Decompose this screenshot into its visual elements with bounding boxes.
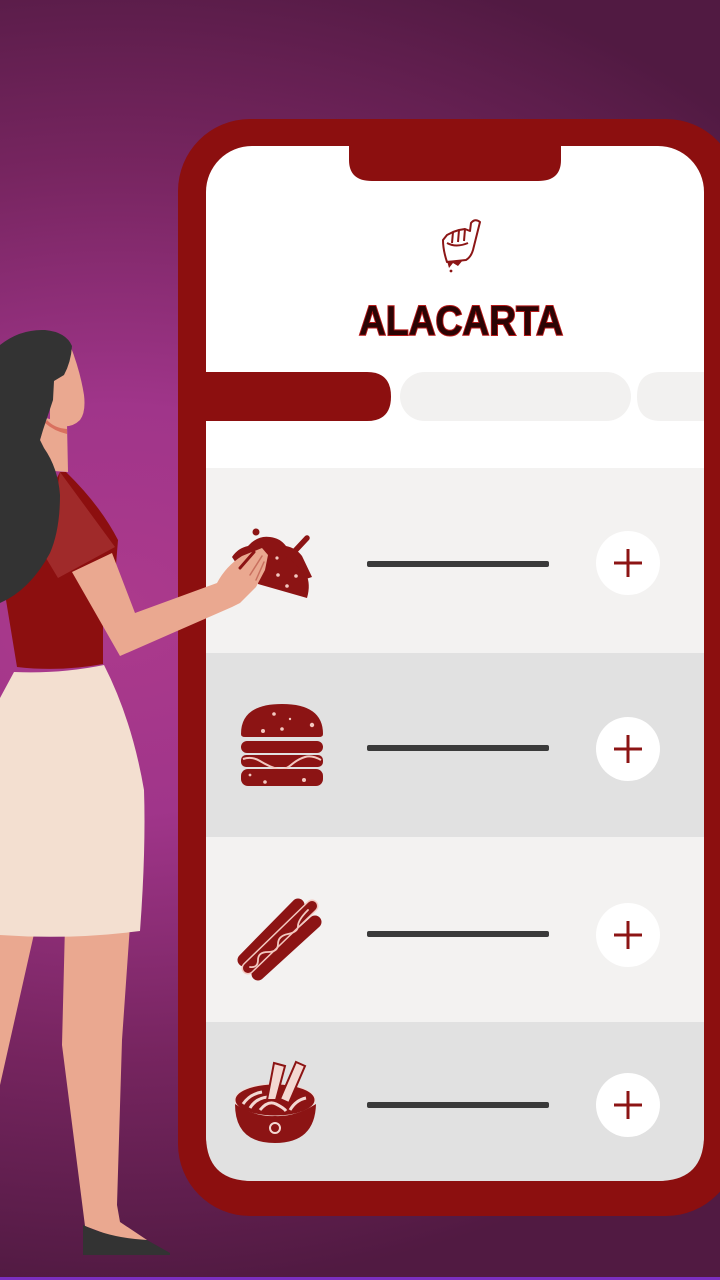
inactive tab [400, 372, 631, 421]
arm and hand [72, 548, 268, 656]
row divider line [367, 1102, 549, 1108]
icon: noodle bowl [235, 1062, 316, 1143]
finger lines [250, 556, 264, 580]
taco leaf over hand [240, 552, 254, 568]
shoe [83, 1225, 170, 1255]
icon: taco [232, 528, 312, 598]
phone screen [206, 146, 704, 1181]
phone notch [349, 146, 561, 181]
row: noodles [206, 1022, 704, 1181]
bottom strip [0, 1277, 720, 1280]
front leg [62, 925, 147, 1243]
active tab [206, 372, 391, 421]
neck [40, 418, 68, 472]
back leg [0, 925, 36, 1085]
phone [178, 119, 720, 1216]
row divider line [367, 931, 549, 937]
category tabs [206, 372, 704, 421]
row divider line [367, 561, 549, 567]
phone frame [178, 119, 720, 1216]
add button [596, 903, 660, 967]
row: taco [206, 468, 704, 653]
row: hot dog [206, 837, 704, 1022]
choker [45, 420, 67, 434]
sleeve [46, 472, 115, 578]
row divider line [367, 745, 549, 751]
icon: pointing hand [443, 220, 480, 272]
inactive tab partial [637, 372, 704, 421]
face [50, 345, 84, 426]
add button [596, 1073, 660, 1137]
add button [596, 717, 660, 781]
shirt [0, 472, 118, 669]
add button [596, 531, 660, 595]
row: burger [206, 653, 704, 837]
icon: hot dog [244, 905, 315, 974]
hair [0, 330, 72, 603]
title: ALACARTA [359, 297, 563, 344]
skirt [0, 665, 144, 937]
woman figure [0, 330, 268, 1255]
icon: burger [241, 704, 323, 786]
